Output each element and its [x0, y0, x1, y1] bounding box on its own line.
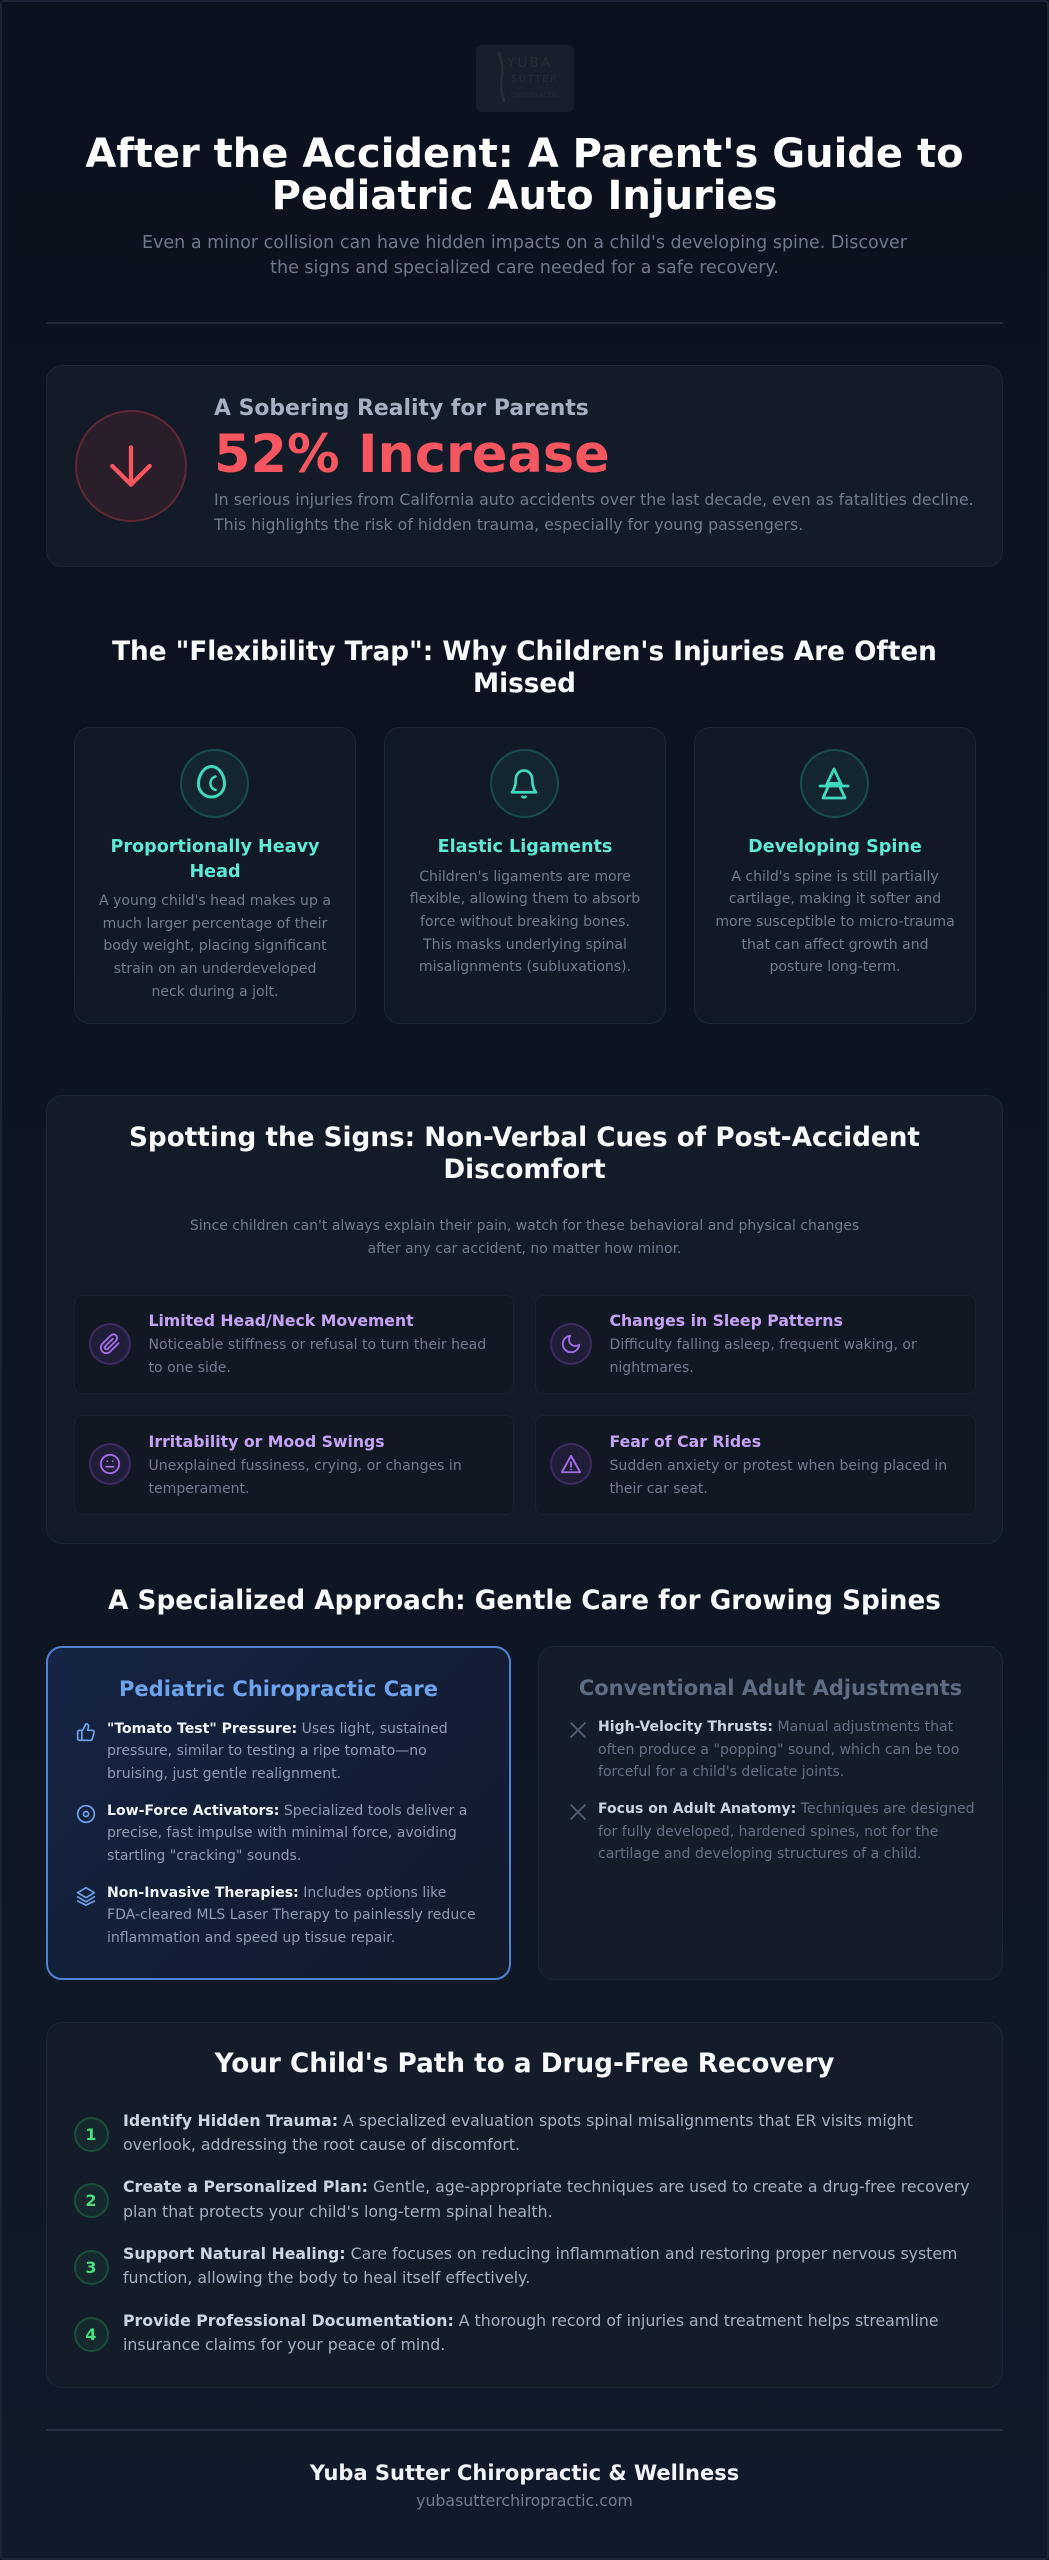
panel: conventional adjustments [538, 1646, 1003, 1980]
icon: bell [490, 749, 558, 818]
icon: head [180, 749, 248, 818]
step number [74, 2250, 108, 2284]
item text: for fully developed, hardened spines, not for the [598, 1824, 938, 1840]
title [85, 131, 964, 219]
icon: neutral face [89, 1443, 131, 1485]
item text [107, 1802, 467, 1864]
item text: FDA-cleared MLS Laser Therapy to painlessly reduce [107, 1907, 476, 1923]
stat description: In serious injuries from California auto accidents over the last decade, even as fatalities decline. [214, 490, 974, 509]
sign: sleep [535, 1294, 976, 1394]
panel: statistic [46, 365, 1003, 567]
heading: signs [129, 1123, 920, 1184]
logo text: YUBA [507, 55, 552, 71]
sign text: nightmares. [610, 1360, 694, 1376]
item text: startling "cracking" sounds. [107, 1848, 301, 1864]
step 3 [74, 2244, 957, 2287]
panel: recovery path [46, 2022, 1003, 2388]
card: spine [694, 727, 976, 1024]
panel: signs [46, 1095, 1003, 1544]
sign text: Noticeable stiffness or refusal to turn their head [148, 1337, 486, 1353]
footer name: Yuba Sutter Chiropractic & Wellness [310, 2460, 739, 2484]
heading: flexibility trap: Missed [473, 668, 576, 698]
panel title: Pediatric Chiropractic Care [119, 1677, 438, 1701]
card title: Head [189, 862, 241, 882]
card text: neck during a jolt. [151, 984, 279, 1000]
sign title: Limited Head/Neck Movement [148, 1311, 414, 1330]
icon: spine [800, 749, 868, 818]
step number: 3 [85, 2258, 97, 2276]
step 2 [74, 2177, 970, 2221]
step text: Provide Professional Documentation: A thorough record of injuries and treatment helps streamline [123, 2310, 939, 2330]
title: Pediatric Auto Injuries [272, 173, 777, 219]
card text [410, 868, 640, 975]
card: heavy head [74, 727, 356, 1024]
card text: body weight, placing significant [103, 938, 327, 954]
sign text: temperament. [148, 1481, 249, 1497]
heading: recovery: Your Child's Path to a Drug-Free Recovery [215, 2049, 834, 2079]
logo text [507, 55, 558, 99]
item text [598, 1801, 975, 1862]
card text [99, 893, 331, 1000]
item text: cartilage and developing structures of a child. [598, 1846, 921, 1862]
step 4 [74, 2310, 939, 2354]
item text: Low-Force Activators: Specialized tools deliver a [107, 1802, 467, 1818]
signs intro: Since children can't always explain their pain, watch for these behavioral and physical changes [190, 1218, 859, 1234]
panel title: Conventional Adult Adjustments [579, 1676, 962, 1700]
step text: overlook, addressing the root cause of discomfort. [123, 2135, 520, 2154]
item text: pressure, similar to testing a ripe tomato—no [107, 1743, 427, 1759]
icon: cross [570, 1804, 586, 1820]
card text: much larger percentage of their [103, 916, 327, 932]
stat description [214, 490, 974, 534]
item text [107, 1720, 448, 1782]
card text: Children's ligaments are more [419, 868, 631, 884]
panel: pediatric care [46, 1646, 511, 1980]
step text: function, allowing the body to heal itself effectively. [123, 2268, 530, 2287]
icon: moon [550, 1323, 592, 1365]
sign text: Difficulty falling asleep, frequent waking, or [610, 1337, 917, 1353]
sign: irritability [74, 1414, 514, 1514]
item text: forceful for a child's delicate joints. [598, 1764, 844, 1780]
step text: Create a Personalized Plan: Gentle, age-appropriate techniques are used to create a drug-free recovery [123, 2177, 970, 2196]
card title: Proportionally Heavy [110, 837, 320, 857]
sign text [148, 1458, 462, 1497]
card title: Elastic Ligaments [438, 837, 612, 857]
item text [107, 1884, 476, 1946]
card text: posture long-term. [769, 959, 901, 975]
step text [123, 2310, 939, 2354]
step text: Support Natural Healing: Care focuses on reducing inflammation and restoring proper nervous system [123, 2244, 957, 2262]
card text: misalignments (subluxations). [419, 959, 631, 975]
subtitle [142, 233, 907, 278]
sign text: Unexplained fussiness, crying, or changes in [148, 1458, 462, 1474]
item text: Focus on Adult Anatomy: Techniques are designed [598, 1801, 975, 1817]
step number: 1 [85, 2124, 97, 2144]
step number: 4 [85, 2324, 97, 2344]
heading: signs: Discomfort [443, 1154, 606, 1184]
card: ligaments [384, 727, 666, 1024]
card text: A child's spine is still partially [731, 868, 939, 884]
item: therapies [76, 1884, 476, 1946]
step number [74, 2116, 108, 2152]
stat number: 52% Increase [214, 424, 610, 485]
step text [123, 2177, 970, 2221]
card text: strain on an underdeveloped [114, 961, 316, 977]
item text: Non-Invasive Therapies: Includes options like [107, 1884, 446, 1900]
item: activators [76, 1802, 467, 1864]
step text [123, 2110, 913, 2154]
icon: target [76, 1804, 96, 1824]
signs intro: after any car accident, no matter how minor. [368, 1241, 682, 1257]
logo text: CHIROPRACTIC [511, 92, 558, 99]
card text: flexible, allowing them to absorb [410, 891, 640, 907]
icon: down arrow [74, 410, 186, 522]
item text: inflammation and speed up tissue repair. [107, 1930, 395, 1946]
sign text: to one side. [148, 1360, 231, 1376]
logo text: SUTTER [511, 74, 558, 85]
step 1 [74, 2110, 913, 2154]
logo [476, 45, 574, 112]
sign: limited movement [74, 1294, 514, 1394]
sign title: Changes in Sleep Patterns [610, 1311, 843, 1330]
subtitle: the signs and specialized care needed for a safe recovery. [270, 258, 779, 278]
card text: A young child's head makes up a [99, 893, 331, 909]
sign: fear of rides [535, 1414, 976, 1514]
icon: paperclip [89, 1323, 131, 1365]
stat description: This highlights the risk of hidden trauma, especially for young passengers. [214, 514, 803, 534]
step text: Identify Hidden Trauma: A specialized evaluation spots spinal misalignments that ER visits might [123, 2110, 913, 2130]
item text: High-Velocity Thrusts: Manual adjustments that [598, 1719, 953, 1735]
card title: Developing Spine [748, 837, 922, 857]
card text: cartilage, making it softer and [729, 891, 941, 907]
item text: precise, fast impulse with minimal force, avoiding [107, 1825, 457, 1841]
item text: bruising, just gentle realignment. [107, 1766, 341, 1782]
subtitle: Even a minor collision can have hidden impacts on a child's developing spine. Discover [142, 233, 907, 253]
step number [74, 2183, 108, 2218]
sign text: Sudden anxiety or protest when being placed in [610, 1458, 947, 1474]
heading: signs: Spotting the Signs: Non-Verbal Cues of Post-Accident [129, 1123, 920, 1153]
sign text [610, 1458, 947, 1497]
heading: flexibility trap: The "Flexibility Trap": Why Children's Injuries Are Often [112, 637, 937, 667]
signs intro [190, 1218, 859, 1257]
card title [110, 837, 320, 882]
icon: thumbs up [76, 1722, 95, 1742]
card text: more susceptible to micro-trauma [715, 914, 955, 930]
step text: insurance claims for your peace of mind. [123, 2335, 445, 2354]
item text: "Tomato Test" Pressure: Uses light, sustained [107, 1720, 448, 1736]
title: After the Accident: A Parent's Guide to [85, 131, 964, 177]
item text [598, 1719, 959, 1780]
sign text: their car seat. [610, 1481, 708, 1497]
card text: that can affect growth and [741, 937, 929, 953]
sign text [148, 1337, 486, 1376]
sign text [610, 1337, 917, 1376]
card text: force without breaking bones. [420, 914, 630, 930]
heading: flexibility trap [112, 637, 937, 698]
item: thrusts [570, 1719, 959, 1780]
stat heading: A Sobering Reality for Parents [214, 396, 589, 420]
step number [74, 2316, 108, 2352]
step text: plan that protects your child's long-term spinal health. [123, 2202, 553, 2221]
icon: layers [76, 1886, 96, 1906]
logo spine mark [498, 52, 505, 102]
footer url: yubasutterchiropractic.com [416, 2491, 633, 2510]
sign title: Fear of Car Rides [610, 1432, 761, 1451]
card text: This masks underlying spinal [423, 937, 627, 953]
card text [715, 868, 955, 975]
step text [123, 2244, 957, 2287]
sign title: Irritability or Mood Swings [148, 1432, 385, 1451]
heading: specialized approach: A Specialized Approach: Gentle Care for Growing Spines [108, 1586, 941, 1616]
item: tomato test [76, 1720, 448, 1782]
step number: 2 [85, 2191, 97, 2210]
icon: cross [570, 1722, 586, 1738]
item: adult anatomy [570, 1801, 975, 1862]
icon: warning [550, 1443, 592, 1485]
item text: often produce a "popping" sound, which can be too [598, 1742, 959, 1758]
